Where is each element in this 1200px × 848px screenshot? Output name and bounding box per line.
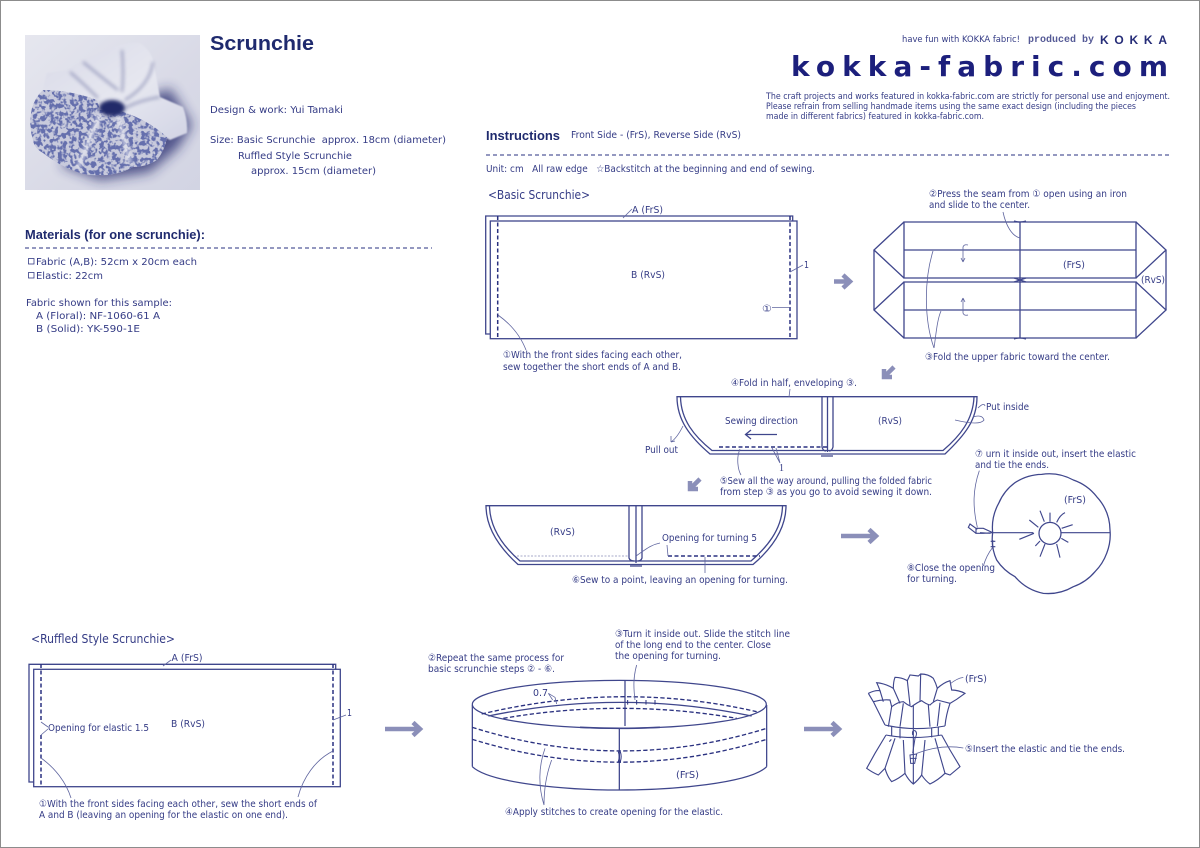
basic scrunchie heading: <Basic Scrunchie> [488, 188, 590, 202]
diagram: ruffled steps 2 to 4: the opening for turning. [615, 651, 721, 662]
diagram: ruffled step 5 [867, 674, 1125, 784]
diagram: step 1 basic: A (FrS) [632, 205, 663, 216]
arrow: ruffled step 1 to 2 [385, 722, 420, 736]
unit note: Unit: cm All raw edge ☆Backstitch at the beginning and end of sewing. [486, 164, 815, 175]
diagram: ruffled steps 2 to 4: ③Turn it inside out. Slide the stitch line [615, 629, 790, 640]
arrow: step 6 to 7 [841, 530, 876, 542]
usage notice: Please refrain from selling handmade items using the same exact design (including the pieces [766, 102, 1136, 112]
materials list: Elastic: 22cm [36, 271, 103, 282]
instructions heading [486, 128, 741, 143]
diagram: steps 7 and 8: and tie the ends. [975, 460, 1049, 471]
instructions heading: Instructions [486, 128, 560, 143]
diagram: ruffled steps 2 to 4 [428, 629, 790, 818]
diagram: steps 7 and 8: ⑧Close the opening [907, 563, 995, 574]
project credits and size: Ruffled Style Scrunchie [238, 151, 352, 162]
diagram: step 6 [486, 506, 788, 586]
arrow: step 1 to 2 [834, 275, 850, 288]
diagram: step 1 ruffled: A (FrS) [172, 653, 203, 664]
diagram: steps 4 and 5: ④Fold in half, enveloping ③. [731, 378, 857, 389]
brand tagline: produced by [1028, 34, 1094, 46]
arrow: step 3 to 4 [884, 367, 894, 377]
materials list: Fabric shown for this sample: [26, 298, 172, 309]
diagram: steps 2 and 3: ②Press the seam from ① open using an iron [929, 189, 1127, 200]
brand tagline: KOKKA [1100, 33, 1167, 47]
diagram: steps 4 and 5: 1 [779, 463, 784, 474]
materials list [26, 257, 197, 335]
diagram: steps 7 and 8 [907, 449, 1136, 594]
diagram: steps 4 and 5: Pull out [645, 445, 678, 456]
diagram: step 1 ruffled: Opening for elastic 1.5 [48, 723, 149, 734]
materials list: A (Floral): NF-1060-61 A [36, 311, 160, 322]
diagram: step 1 ruffled: A and B (leaving an opening for the elastic on one end). [39, 810, 288, 821]
diagram: step 6: (RvS) [550, 527, 575, 538]
diagram: step 1 basic [486, 205, 809, 373]
materials list: Fabric (A,B): 52cm x 20cm each [36, 257, 197, 268]
diagram: steps 4 and 5: Put inside [986, 402, 1029, 413]
usage notice: made in different fabrics) featured in kokka-fabric.com. [766, 112, 984, 122]
diagram: step 1 ruffled: 1 [347, 708, 352, 719]
diagram: steps 2 and 3: (RvS) [1141, 275, 1165, 286]
usage notice [765, 92, 1170, 122]
materials list: B (Solid): YK-590-1E [36, 324, 140, 335]
diagram: ruffled steps 2 to 4: ②Repeat the same process for [428, 653, 565, 664]
diagram: step 1 basic: sew together the short ends of A and B. [503, 362, 681, 373]
diagram: ruffled steps 2 to 4: 0.7 [533, 688, 548, 699]
diagram: steps 4 and 5: (RvS) [878, 416, 902, 427]
diagram: steps 7 and 8: (FrS) [1064, 495, 1086, 506]
project credits and size [210, 105, 446, 177]
diagram: steps 7 and 8: ⑦ urn it inside out, insert the elastic [975, 449, 1136, 460]
diagram: step 1 ruffled: B (RvS) [171, 719, 205, 730]
photo: finished scrunchie [25, 35, 200, 190]
diagram: ruffled steps 2 to 4: ④Apply stitches to create opening for the elastic. [505, 807, 723, 818]
brand logo: kokka-fabric.com [791, 50, 1168, 83]
instructions heading: Front Side - (FrS), Reverse Side (RvS) [571, 130, 741, 141]
diagram: step 1 ruffled: ①With the front sides facing each other, sew the short ends of [39, 799, 317, 810]
diagram: ruffled step 5: ⑤Insert the elastic and tie the ends. [965, 744, 1125, 755]
project credits and size: Design & work: Yui Tamaki [210, 105, 343, 116]
arrow: step 5 to 6 [690, 479, 700, 489]
diagram: step 1 ruffled [29, 653, 352, 821]
project credits and size: Size: Basic Scrunchie approx. 18cm (diameter) [210, 135, 446, 146]
brand tagline [902, 33, 1167, 47]
diagram: steps 4 and 5 [645, 378, 1029, 498]
diagram: step 1 basic: B (RvS) [631, 270, 665, 281]
diagram: ruffled steps 2 to 4: (FrS) [676, 770, 699, 781]
brand tagline: have fun with KOKKA fabric! [902, 35, 1020, 45]
diagram: steps 2 and 3 [874, 189, 1166, 363]
ruffled scrunchie heading: <Ruffled Style Scrunchie> [31, 632, 175, 646]
diagram: steps 4 and 5: ⑤Sew all the way around, pulling the folded fabric [720, 476, 932, 487]
diagram: steps 7 and 8: for turning. [907, 574, 957, 585]
title: Scrunchie [210, 33, 314, 55]
materials heading: Materials (for one scrunchie): [25, 227, 205, 242]
diagram: steps 4 and 5: from step ③ as you go to avoid sewing it down. [720, 487, 932, 498]
diagram: steps 2 and 3: and slide to the center. [929, 200, 1030, 211]
diagram: steps 2 and 3: (FrS) [1063, 260, 1085, 271]
diagram: step 1 basic: ① [762, 304, 772, 315]
diagram: step 1 basic: 1 [804, 260, 809, 271]
project credits and size: approx. 15cm (diameter) [251, 166, 376, 177]
diagram: step 6: Opening for turning 5 [662, 533, 757, 544]
diagram: ruffled steps 2 to 4: of the long end to the center. Close [615, 640, 771, 651]
diagram: ruffled step 5: (FrS) [965, 674, 987, 685]
arrow: ruffled step 4 to 5 [804, 722, 839, 736]
diagram: step 1 basic: ①With the front sides facing each other, [503, 350, 682, 361]
diagram: steps 2 and 3: ③Fold the upper fabric toward the center. [925, 352, 1110, 363]
diagram: ruffled steps 2 to 4: basic scrunchie steps ② - ⑥. [428, 664, 555, 675]
diagram: steps 4 and 5: Sewing direction [725, 416, 798, 427]
diagram: step 6: ⑥Sew to a point, leaving an opening for turning. [572, 575, 788, 586]
